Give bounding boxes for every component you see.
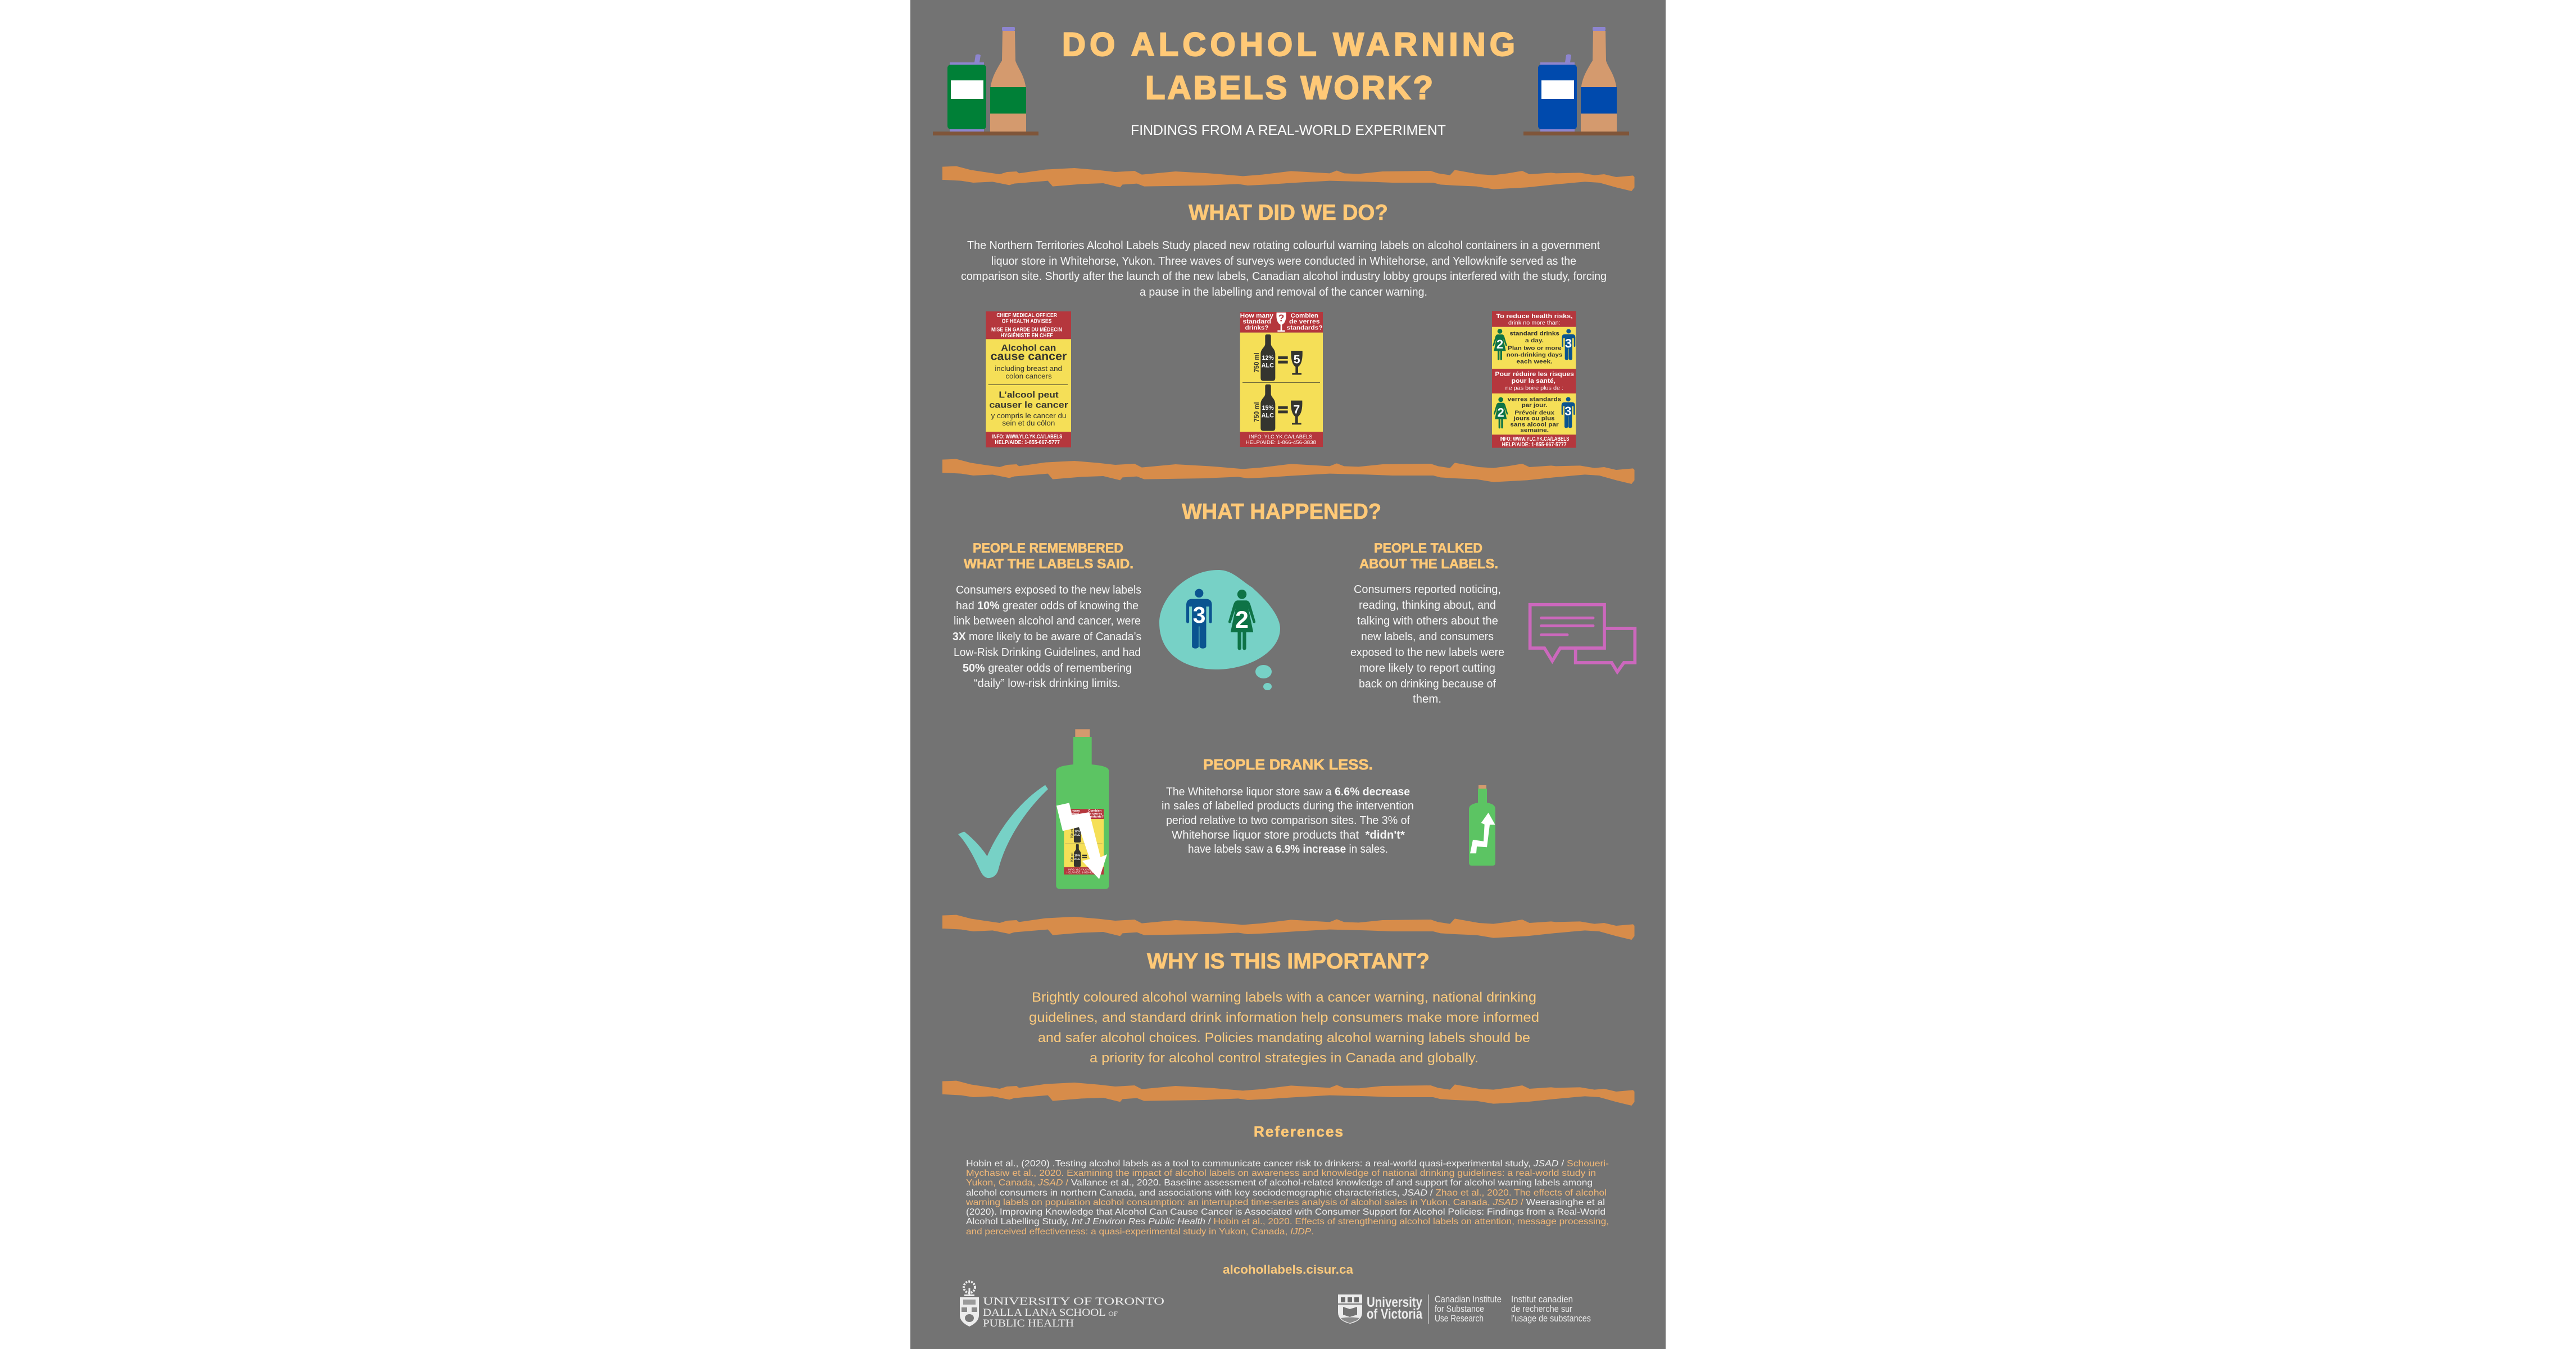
icon: thought bubble with figures: 3: [1193, 602, 1205, 628]
heading: people remembered: WHAT THE LABELS SAID.: [964, 556, 1133, 572]
mini warning label: standard: [1065, 812, 1079, 816]
text block: study description: [961, 239, 1607, 298]
mini warning label: [1064, 809, 1104, 875]
text block: people drank less: [1162, 785, 1414, 855]
warning label: drinking guidelines: a day.: [1525, 338, 1544, 344]
mini warning label: How many: [1064, 809, 1080, 813]
warning label: drinking guidelines: To reduce health risks,: [1496, 313, 1573, 320]
warning label: drinking guidelines: each week.: [1516, 359, 1553, 365]
warning label: cancer: INFO: WWW.YLC.YK.CA/LABELS: [992, 434, 1063, 440]
heading: people remembered: PEOPLE REMEMBERED: [973, 541, 1123, 556]
text block: people drank less: Whitehorse liquor store products that *didn't*: [1172, 829, 1405, 841]
text block: people talked: [1350, 583, 1504, 705]
mini warning label: ALC: [1074, 834, 1080, 837]
warning label: drinking guidelines: semaine.: [1520, 428, 1549, 434]
logo: University of Toronto Dalla Lana School of Public Health: DALLA LANA SCHOOL OF: [983, 1307, 1118, 1319]
warning label: standard drinks: 15%: [1262, 405, 1274, 411]
title: DO ALCOHOL WARNING: [1062, 26, 1515, 63]
mini warning label: de verres: [1087, 812, 1103, 816]
heading: people talked: ABOUT THE LABELS.: [1359, 556, 1498, 572]
heading: references: References: [1254, 1123, 1343, 1140]
mini warning label: HELP/AIDE: 1-866-456-3838: [1067, 871, 1101, 873]
text block: people talked: Consumers reported noticing,: [1354, 583, 1501, 596]
text block: people drank less: in sales of labelled products during the intervention: [1162, 799, 1414, 812]
warning label: drinking guidelines: standard drinks: [1509, 331, 1559, 337]
heading: what did we do: WHAT DID WE DO?: [1189, 201, 1388, 225]
text block: references: and perceived effectiveness: a quasi-experimental study in Yukon, Canada, IJDP.: [966, 1227, 1314, 1237]
arrow: sales up: [1470, 813, 1495, 853]
warning label: cancer: HYGIÉNISTE EN CHEF: [1001, 332, 1053, 339]
warning label: standard drinks: How many: [1240, 313, 1274, 319]
text block: people remembered: [953, 583, 1141, 690]
illustration: small bottle with up arrow: [1469, 785, 1495, 866]
mini warning label: 750 ml: [1071, 853, 1074, 862]
text block: importance statement: guidelines, and standard drink information help consumers make more informed: [1029, 1010, 1539, 1025]
logo: University of Victoria CISUR: Canadian Institute: [1435, 1294, 1502, 1305]
warning label: cancer: OF HEALTH ADVISES: [1002, 319, 1051, 325]
text block: references: (2020). Improving Knowledge that Alcohol Can Cause Cancer is Associated with Consumer Support for Alcohol Policies: Findings from a Real-World: [966, 1207, 1606, 1217]
heading: people talked: [1359, 541, 1498, 572]
warning label: drinking guidelines: 2: [1496, 337, 1503, 351]
logo: University of Toronto Dalla Lana School of Public Health: [960, 1282, 1164, 1329]
subtitle: FINDINGS FROM A REAL-WORLD EXPERIMENT: [1131, 123, 1446, 138]
heading: people remembered: [964, 541, 1133, 572]
warning label: cancer: [986, 311, 1071, 447]
warning label: standard drinks: ?: [1278, 313, 1284, 324]
text block: people remembered: Low-Risk Drinking Guidelines, and had: [954, 646, 1141, 659]
logo: University of Victoria CISUR: of Victoria: [1367, 1306, 1423, 1322]
warning label: drinking guidelines: [1492, 311, 1576, 448]
text block: references: alcohol consumers in northern Canada, and associations with key sociodemographic characteristics, JSAD / Zhao et al., 2020. The effects of alcohol: [966, 1188, 1607, 1198]
warning label: standard drinks: 7: [1293, 402, 1300, 416]
warning label: standard drinks: Combien: [1291, 313, 1318, 319]
logo: University of Victoria CISUR: University: [1367, 1294, 1422, 1310]
warning label: cancer: CHIEF MEDICAL OFFICER: [996, 313, 1057, 319]
warning label: drinking guidelines: ne pas boire plus de :: [1505, 385, 1563, 391]
heading: people talked: PEOPLE TALKED: [1374, 541, 1482, 556]
text block: people drank less: period relative to two comparison sites. The 3% of: [1166, 814, 1410, 827]
warning label: drinking guidelines: 3: [1565, 336, 1572, 350]
warning label: cancer: y compris le cancer du: [991, 411, 1066, 420]
warning label: standard drinks: INFO: YLC.YK.CA/LABELS: [1249, 434, 1312, 440]
text block: people talked: talking with others about the: [1357, 614, 1498, 627]
heading: what happened: WHAT HAPPENED?: [1182, 500, 1381, 524]
text block: people talked: new labels, and consumers: [1361, 630, 1494, 643]
mini warning label: standards?: [1086, 816, 1104, 819]
illustration: green can and bottle on shelf: [933, 27, 1038, 135]
warning label: cancer: including breast and: [995, 364, 1062, 373]
illustration: large labelled bottle with down arrow: [1056, 729, 1109, 889]
logo: University of Toronto Dalla Lana School of Public Health: UNIVERSITY OF TORONTO: [983, 1296, 1164, 1307]
title: LABELS WORK?: [1145, 70, 1433, 106]
logo: University of Victoria CISUR: Use Research: [1435, 1313, 1484, 1324]
warning label: cancer: MISE EN GARDE DU MÉDECIN: [991, 326, 1062, 333]
text block: references: [965, 1159, 1609, 1237]
icon: check mark: [958, 785, 1048, 878]
warning label: drinking guidelines: sans alcool par: [1510, 422, 1559, 428]
warning label: cancer: HELP/AIDE: 1-855-667-5777: [995, 440, 1060, 446]
warning label: drinking guidelines: Pour réduire les risques: [1495, 371, 1574, 378]
text block: people remembered: had 10% greater odds of knowing the: [956, 599, 1139, 612]
warning label: standard drinks: ALC: [1262, 362, 1274, 369]
warning label: drinking guidelines: 2: [1498, 406, 1504, 420]
logo: University of Victoria CISUR: for Substance: [1435, 1303, 1484, 1314]
illustration: blue can and bottle on shelf: [1523, 27, 1629, 135]
warning label: cancer: Alcohol can: [1001, 343, 1056, 353]
warning label: drinking guidelines: par jour.: [1522, 402, 1548, 409]
warning label: standard drinks: 750 ml: [1253, 352, 1260, 373]
mini warning label: 15%: [1074, 854, 1080, 858]
text block: study description: comparison site. Shortly after the launch of the new labels, Canadian alcohol industry lobby groups interfered with the study, forcing: [961, 270, 1607, 283]
warning label: cancer: sein et du côlon: [1002, 419, 1055, 427]
warning label: drinking guidelines: non-drinking days: [1507, 352, 1563, 358]
text block: people remembered: “daily” low-risk drinking limits.: [974, 677, 1121, 690]
warning label: drinking guidelines: pour la santé,: [1512, 378, 1555, 384]
warning label: drinking guidelines: verres standards: [1508, 396, 1562, 402]
warning label: cancer: L’alcool peut: [999, 391, 1059, 400]
heading: why is this important: WHY IS THIS IMPORTANT?: [1147, 949, 1430, 974]
warning label: standard drinks: 5: [1294, 353, 1300, 366]
warning label: drinking guidelines: HELP/AIDE: 1-855-667-5777: [1502, 442, 1567, 448]
icon: thought bubble with figures: 2: [1235, 606, 1249, 633]
text block: people talked: exposed to the new labels were: [1350, 646, 1504, 659]
logo: University of Victoria CISUR: Institut canadien: [1511, 1294, 1573, 1305]
text block: people drank less: have labels saw a 6.9% increase in sales.: [1188, 843, 1388, 855]
warning label: cancer: causer le cancer: [989, 400, 1068, 410]
text block: study description: The Northern Territories Alcohol Labels Study placed new rotating colourful warning labels on alcohol containers in a government: [967, 239, 1600, 252]
text block: people remembered: 50% greater odds of remembering: [963, 662, 1132, 674]
link: project website: alcohollabels.cisur.ca: [1223, 1262, 1354, 1276]
warning label: cancer: cause cancer: [991, 351, 1067, 363]
warning label: standard drinks: standards?: [1287, 324, 1323, 331]
icon: thought bubble with figures: [1159, 570, 1280, 690]
text block: references: Yukon, Canada, JSAD / Vallance et al., 2020. Baseline assessment of alcohol-related knowledge of and support for alcohol warning labels among: [966, 1178, 1593, 1188]
warning label: standard drinks: ALC: [1262, 412, 1274, 419]
text block: importance statement: Brightly coloured alcohol warning labels with a cancer warning, national drinking: [1032, 990, 1536, 1005]
arrow: sales down: [1056, 803, 1107, 879]
text block: importance statement: and safer alcohol choices. Policies mandating alcohol warning labels should be: [1038, 1030, 1530, 1045]
logo: University of Toronto Dalla Lana School of Public Health: PUBLIC HEALTH: [983, 1318, 1074, 1329]
text block: people remembered: Consumers exposed to the new labels: [956, 583, 1141, 596]
text block: study description: a pause in the labelling and removal of the cancer warning.: [1140, 286, 1427, 298]
mini warning label: 12%: [1074, 830, 1080, 834]
warning label: standard drinks: drinks?: [1245, 324, 1269, 331]
text block: study description: liquor store in Whitehorse, Yukon. Three waves of surveys were conducted in Whitehorse, and Yellowknife served as the: [991, 255, 1576, 268]
text block: importance statement: a priority for alcohol control strategies in Canada and globally.: [1090, 1051, 1479, 1066]
warning label: drinking guidelines: INFO: WWW.YLC.YK.CA/LABELS: [1500, 436, 1570, 442]
text block: references: Hobin et al., (2020) .Testing alcohol labels as a tool to communicate cancer risk to drinkers: a real-world quasi-experimental study, JSAD / Schoueri-: [966, 1159, 1609, 1169]
text block: references: Mychasiw et al., 2020. Examining the impact of alcohol labels on awareness and knowledge of national drinking guidelines: a real-world study in: [966, 1169, 1596, 1178]
warning label: drinking guidelines: 3: [1564, 404, 1571, 418]
mini warning label: INFO: YLC.YK.CA/LABELS: [1068, 868, 1099, 871]
text block: people talked: more likely to report cutting: [1359, 662, 1495, 674]
text block: people remembered: 3X more likely to be aware of Canada’s: [953, 630, 1141, 643]
warning label: standard drinks: de verres: [1289, 319, 1320, 325]
text block: people talked: back on drinking because of: [1359, 677, 1496, 690]
logo: University of Victoria CISUR: [1338, 1294, 1591, 1324]
mini warning label: 750 ml: [1071, 829, 1074, 839]
panel: grey infographic background: [910, 0, 1666, 1349]
text block: references: warning labels on population alcohol consumption: an interrupted time-series analysis of alcohol sales in Yukon, Canada, JSAD / Weerasinghe et al: [965, 1198, 1605, 1207]
warning label: standard drinks: HELP/AIDE: 1-866-456-3838: [1246, 440, 1316, 445]
logo: University of Victoria CISUR: de recherche sur: [1511, 1303, 1572, 1314]
warning label: drinking guidelines: drink no more than:: [1508, 320, 1561, 327]
icon: speech bubbles: [1530, 605, 1635, 672]
warning label: standard drinks: 12%: [1262, 355, 1274, 361]
warning label: standard drinks: [1240, 312, 1323, 447]
logo: University of Victoria CISUR: l'usage de substances: [1511, 1313, 1591, 1324]
text block: people remembered: link between alcohol and cancer, were: [954, 614, 1141, 627]
mini warning label: ALC: [1074, 858, 1080, 861]
mini warning label: Combien: [1089, 809, 1101, 813]
warning label: drinking guidelines: Prévoir deux: [1514, 410, 1555, 416]
text block: references: Alcohol Labelling Study, Int J Environ Res Public Health / Hobin et al., 2020. Effects of strengthening alcohol labels on attention, message processing,: [966, 1217, 1609, 1226]
text block: people talked: them.: [1413, 692, 1441, 705]
warning label: drinking guidelines: jours ou plus: [1513, 416, 1555, 422]
warning label: standard drinks: 750 ml: [1253, 402, 1260, 422]
warning label: drinking guidelines: Plan two or more: [1508, 346, 1562, 352]
heading: people drank less: PEOPLE DRANK LESS.: [1203, 756, 1373, 773]
text block: people talked: reading, thinking about, and: [1359, 599, 1496, 612]
warning label: standard drinks: standard: [1242, 319, 1271, 325]
text block: importance statement: [1029, 990, 1539, 1066]
text block: people drank less: The Whitehorse liquor store saw a 6.6% decrease: [1166, 785, 1410, 798]
title: [1062, 26, 1515, 106]
warning label: cancer: colon cancers: [1005, 372, 1052, 380]
